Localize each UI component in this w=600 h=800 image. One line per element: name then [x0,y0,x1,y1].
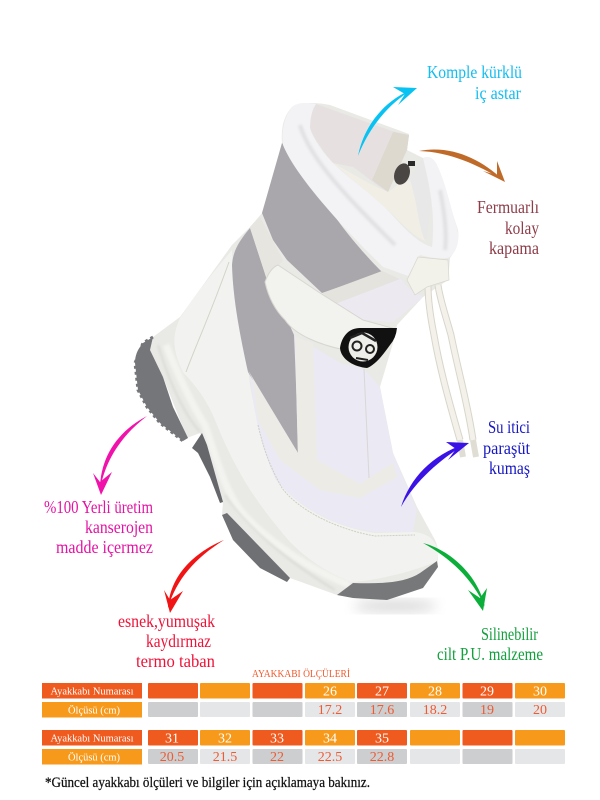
row: measurements 31-35: 22 [270,750,284,765]
cuff front inner shade [410,158,431,241]
callout: sole: esnek,yumuşak [118,611,215,631]
callout: origin: madde içermez [56,537,153,557]
arrow: magenta to origin note [93,416,147,495]
row: shoe numbers 26-30: 30 [533,684,547,700]
row: measurements 26-30: 17.6 [370,703,394,718]
row: measurements 31-35: 22.8 [370,750,394,765]
midsole highlight band [166,345,350,585]
row: shoe numbers 26-30 [42,683,565,700]
row: shoe numbers 31-35: 35 [375,732,389,746]
callout: origin: kanserojen [85,517,153,537]
row: measurements 31-35 [42,749,565,765]
row: shoe numbers 26-30: 29 [480,684,494,700]
callout: lining [427,62,522,103]
toe sole [337,561,438,600]
row: shoe numbers 31-35: 32 [218,732,232,746]
size table: second block [42,730,565,765]
tongue webbing [323,271,400,306]
cuff shading [300,125,446,250]
row: shoe numbers 26-30: 26 [323,684,337,700]
callout: fabric [483,417,530,478]
arrow: cyan to lining [358,87,417,156]
row: measurements 26-30: 19 [480,703,494,718]
row: measurements 26-30: 20 [533,703,547,718]
vamp stitching [258,425,415,536]
callout: fabric: paraşüt [483,438,530,458]
row: measurements 31-35: 22.5 [318,750,342,765]
vamp seam [364,369,369,478]
callout: sole: termo taban [136,651,215,671]
callout: zipper [477,197,539,258]
upper grey panel [262,143,382,293]
lower leather upper [174,250,438,582]
row: measurements 26-30 [42,702,565,718]
strap [265,265,392,350]
callout: sole [118,611,215,671]
callout: zipper: kolay [505,218,539,238]
back webbing band [372,132,409,192]
boot silhouette base [150,103,458,600]
callout: leather: cilt P.U. malzeme [437,644,543,664]
toe shadow [353,599,437,613]
arrow: green to leather note [423,543,487,611]
footnote: *Güncel ayakkabı ölçüleri ve bilgiler için açıklamaya bakınız. [45,775,370,791]
row: measurements 31-35: Ölçüsü (cm) [68,752,120,764]
row: shoe numbers 31-35: 34 [323,732,337,746]
row: shoe numbers 31-35: Ayakkabı Numarası [50,732,134,744]
row: measurements 26-30: 17.2 [318,703,342,718]
webbing strip vertical [295,337,317,460]
row: shoe numbers 26-30: 27 [375,684,389,700]
callout: leather: Silinebilir [481,624,538,644]
row: measurements 26-30: Ölçüsü (cm) [68,704,120,716]
row: shoe numbers 26-30: Ayakkabı Numarası [50,686,134,698]
row: measurements 26-30: 18.2 [423,703,447,718]
row: measurements 31-35: 20.5 [160,750,184,765]
arrow: red to sole note [164,540,224,613]
tongue panel [323,272,423,322]
row: shoe numbers 26-30: 28 [428,684,442,700]
callout: zipper: Fermuarlı [477,197,539,217]
callout: leather [437,624,543,664]
cord stopper [407,257,449,295]
row: shoe numbers 31-35: 33 [270,732,284,746]
midsole contour [158,345,335,590]
inner back lining [310,104,409,192]
leather piping stitch [186,262,229,372]
callout: lining: Komple kürklü [427,62,522,82]
lilac vamp [250,337,417,532]
callout: origin [44,497,153,557]
callout: fabric: kumaş [489,458,530,478]
callout: zipper: kapama [489,238,539,258]
heel sole [135,337,188,441]
arrow: blue to fabric [401,442,469,507]
webbing strip curved [248,370,397,498]
size table: first block [42,683,565,718]
arrow: brown to zipper [419,150,505,182]
zipper pull [391,161,415,187]
front sole [222,513,290,582]
callout: sole: kaydırmaz [146,631,211,651]
row: measurements 31-35: 21.5 [213,750,237,765]
callout: fabric: Su itici [488,417,530,437]
callout: origin: %100 Yerli üretim [44,497,153,517]
laces [428,285,476,457]
row: shoe numbers 31-35 [42,730,565,746]
size table heading: AYAKKABI ÖLÇÜLERİ [252,668,350,680]
boot illustration [135,103,476,613]
heel grey lug [192,433,223,503]
brand badge [340,328,397,368]
upper webbing [250,217,283,280]
callout: lining: iç astar [475,83,521,103]
lower grey panel [232,228,298,453]
fur lining [333,163,425,241]
cuff roll [282,103,458,276]
row: shoe numbers 31-35: 31 [165,732,179,746]
